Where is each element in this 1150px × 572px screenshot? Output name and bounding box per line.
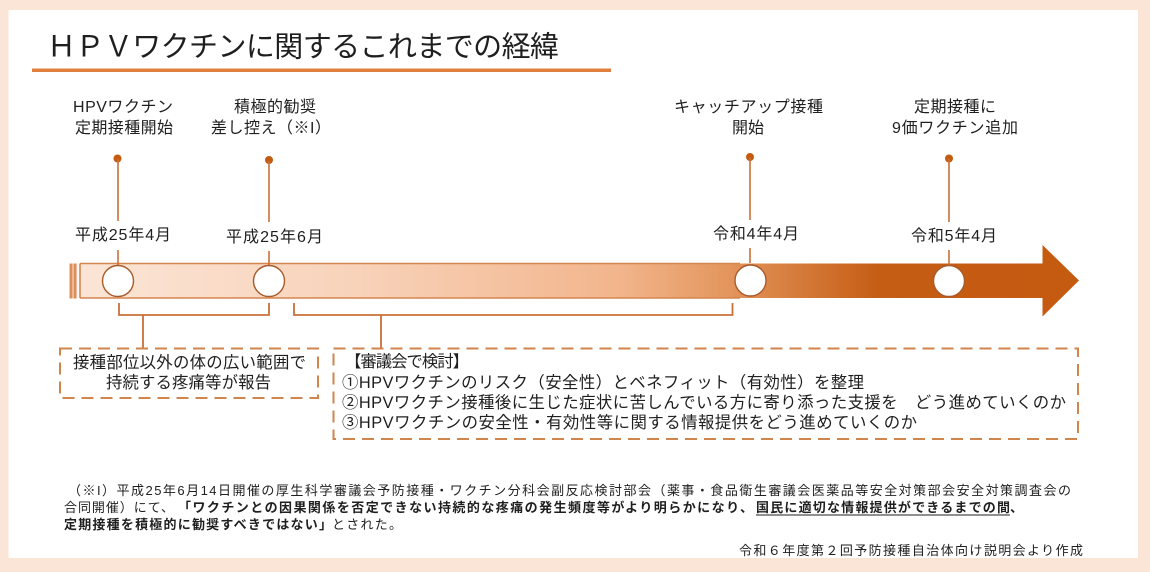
milestone: proactive recommendation suspended [211,98,331,296]
callout: council review: ②HPVワクチン接種後に生じた症状に苦しんでいる方に寄り添った支援を どう進めていくのか [342,394,1066,412]
milestone: proactive recommendation suspended: 積極的勧奨 [234,98,316,116]
footnote: 合同開催）にて、 [64,500,174,515]
footnote: （※I）平成25年6月14日開催の厚生科学審議会予防接種・ワクチン分科会副反応検討部会（薬事・食品衛生審議会医薬品等安全対策部会安全対策調査会の [68,483,1071,498]
callout: reported pain: 接種部位以外の体の広い範囲で [73,354,306,372]
source note: 令和６年度第２回予防接種自治体向け説明会より作成 [739,543,1083,558]
milestone: HPV vaccine routine start: HPVワクチン [73,98,173,116]
milestone: catch-up vaccination start: 令和4年4月 [713,225,799,243]
milestone: HPV vaccine routine start: 定期接種開始 [75,119,173,137]
milestone: 9-valent vaccine added [892,98,1018,296]
callout: reported pain [60,348,318,398]
footnote: 定期接種を積極的に勧奨すべきではない」 [64,517,332,532]
milestone: HPV vaccine routine start: 平成25年4月 [75,226,171,244]
title: ＨＰＶワクチンに関するこれまでの経緯 [47,30,559,64]
callout: council review: ①HPVワクチンのリスク（安全性）とベネフィット（有効性）を整理 [342,374,864,392]
footnote: とされた。 [332,517,402,532]
milestone: 9-valent vaccine added: 定期接種に [914,98,996,116]
footnote: 国民に適切な情報提供ができるまでの間 [756,500,1010,515]
milestone: 9-valent vaccine added: 9価ワクチン追加 [892,119,1018,137]
timeline arrow [70,245,1079,316]
footnote: 、 [1010,500,1023,515]
title underline [32,68,611,72]
milestone: HPV vaccine routine start [73,98,173,296]
callout: reported pain: 持続する疼痛等が報告 [106,374,271,392]
callout: council review: 【審議会で検討】 [345,353,469,371]
footnote: 「ワクチンとの因果関係を否定できない持続的な疼痛の発生頻度等がより明らかになり、 [178,500,753,515]
bracket: left period [119,303,269,348]
callout: council review [334,348,1078,439]
milestone: proactive recommendation suspended: 平成25年6月 [226,228,323,246]
milestone: catch-up vaccination start [674,98,823,296]
callout: council review: ③HPVワクチンの安全性・有効性等に関する情報提供をどう進めていくのか [342,414,917,432]
milestone: 9-valent vaccine added: 令和5年4月 [911,227,997,245]
milestone: catch-up vaccination start: キャッチアップ接種 [674,98,823,116]
footnote [64,483,1071,532]
milestone: proactive recommendation suspended: 差し控え（※I） [211,119,331,137]
bracket: right period [294,303,732,348]
milestone: catch-up vaccination start: 開始 [732,119,764,137]
